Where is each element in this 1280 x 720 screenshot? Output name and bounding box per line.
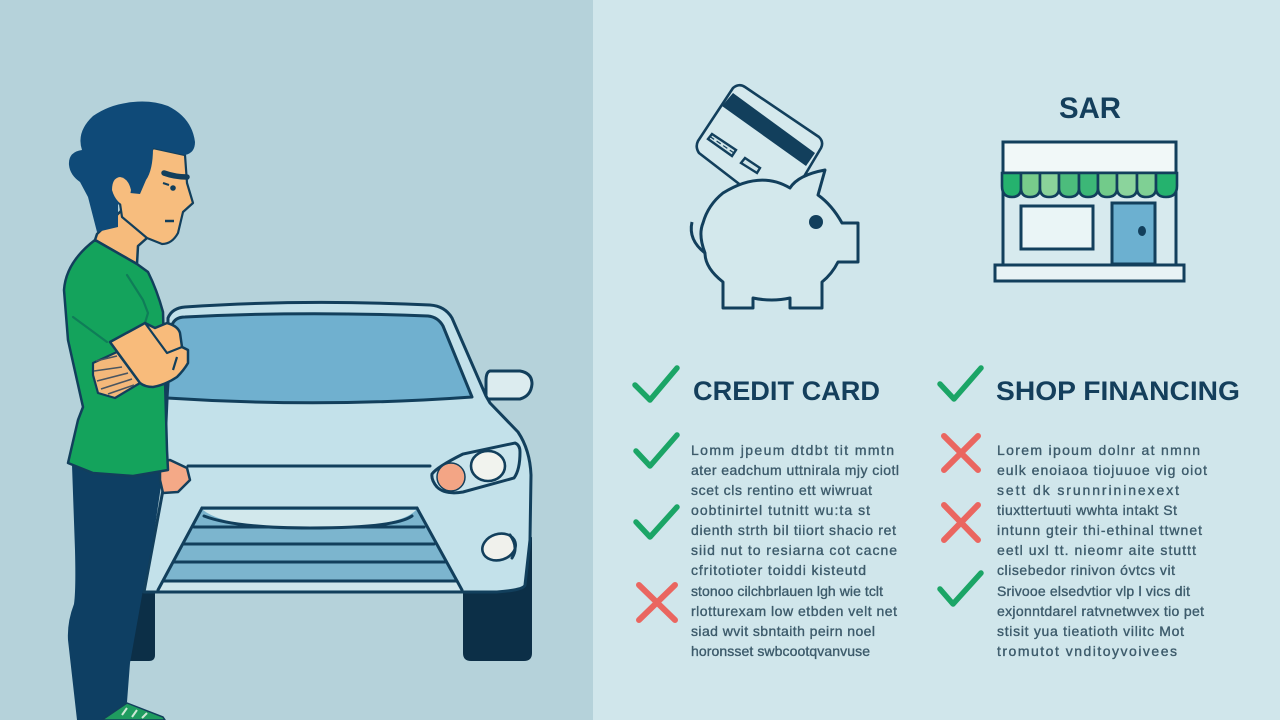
icon: cross xyxy=(639,585,675,620)
person lower hand xyxy=(93,352,140,398)
person forearm and hand xyxy=(110,323,188,387)
text block: shop financing: intunn gteir thi-ethinal ttwnet xyxy=(997,522,1202,538)
text block: credit card: siad wvit sbntaith peirn noel xyxy=(691,623,875,639)
car hood line xyxy=(188,464,430,468)
text block: shop financing: tromutot vnditoyvoivees xyxy=(997,643,1177,659)
car right wheel xyxy=(463,537,532,661)
person neck xyxy=(95,210,147,264)
icon: check 2 xyxy=(636,507,677,537)
person eyebrow xyxy=(164,173,187,177)
heading: credit card: CREDIT CARD xyxy=(693,376,880,406)
person trousers xyxy=(68,465,163,720)
text block: credit card: ater eadchum uttnirala mjy ciotl xyxy=(691,462,899,478)
person illustration xyxy=(64,102,195,720)
person shirt folds xyxy=(73,275,148,342)
text block: credit card: siid nut to resiarna cot cacne xyxy=(691,542,897,558)
person eye xyxy=(163,183,176,191)
heading: shop financing: SHOP FINANCING xyxy=(996,376,1240,406)
car body xyxy=(144,302,531,592)
text block: credit card: oobtinirtel tutnitt wu:ta st xyxy=(691,502,870,518)
panel: left background xyxy=(0,0,593,720)
text block: shop financing: Lorem ipoum dolnr at nmnn xyxy=(997,442,1200,458)
text block: shop financing: eulk enoiaoa tiojuuoe vig oiot xyxy=(997,462,1207,478)
panel: right background xyxy=(593,0,1280,720)
person hand on car xyxy=(160,460,190,493)
car windshield xyxy=(167,314,472,403)
car illustration xyxy=(130,302,532,661)
shop window xyxy=(1021,206,1093,249)
text block: credit card: dienth strth bil tiiort shacio ret xyxy=(691,522,896,538)
car headlight xyxy=(432,443,520,493)
text block: shop financing: clisebedor rinivon óvtcs vit xyxy=(997,562,1175,578)
text block: shop financing: stisit yua tieatioth vilitc Mot xyxy=(997,623,1184,639)
credit card check and cross icons xyxy=(636,435,677,620)
icon: check xyxy=(940,573,981,604)
text block: credit card: horonsset swbcootqvanvuse xyxy=(691,643,870,659)
icon: credit card heading check xyxy=(635,368,677,400)
shop awning xyxy=(1002,173,1177,197)
shop financing check and cross icons xyxy=(940,436,981,604)
icon: shop financing heading check xyxy=(940,368,981,399)
car fog light xyxy=(479,529,519,565)
icon: piggy bank xyxy=(691,170,858,308)
person hair xyxy=(69,102,195,232)
shop wall xyxy=(1003,173,1176,265)
text block: shop financing: exjonntdarel ratvnetwvex tio pet xyxy=(997,603,1204,619)
car side mirror xyxy=(486,371,532,399)
label: SAR: SAR xyxy=(1059,92,1121,125)
car grille xyxy=(158,508,462,590)
person face xyxy=(118,148,193,244)
text block: shop financing: tiuxttertuuti wwhta intakt St xyxy=(997,502,1177,518)
text block: credit card: Lomm jpeum dtdbt tit mmtn xyxy=(691,442,894,458)
text block: credit card: stonoo cilchbrlauen lgh wie tclt xyxy=(691,583,883,599)
icon: shop xyxy=(995,142,1184,281)
text block: shop financing: Srivooe elsedvtior vlp l vics dit xyxy=(997,583,1190,599)
icon: credit card entering piggy bank xyxy=(691,85,858,308)
shop base xyxy=(995,265,1184,281)
shop sign xyxy=(1003,142,1176,173)
text block: shop financing: eetl uxl tt. nieomr aite stuttt xyxy=(997,542,1196,558)
person mouth xyxy=(165,220,174,222)
person shirt xyxy=(64,240,168,476)
text block: credit card: scet cls rentino ett wiwruat xyxy=(691,482,872,498)
icon: cross 2 xyxy=(944,505,978,540)
person ear xyxy=(112,177,131,207)
text block: credit card: rlotturexam low etbden velt net xyxy=(691,603,897,619)
car left wheel xyxy=(130,585,155,661)
text block: credit card: cfritotioter toiddi kisteutd xyxy=(691,562,866,578)
text block: shop financing: sett dk srunnrininexext xyxy=(997,482,1179,498)
icon: check 1 xyxy=(636,435,677,466)
icon: cross 1 xyxy=(944,436,978,470)
shop door xyxy=(1112,203,1155,264)
person shoe xyxy=(102,703,165,720)
icon: credit card xyxy=(697,85,822,200)
